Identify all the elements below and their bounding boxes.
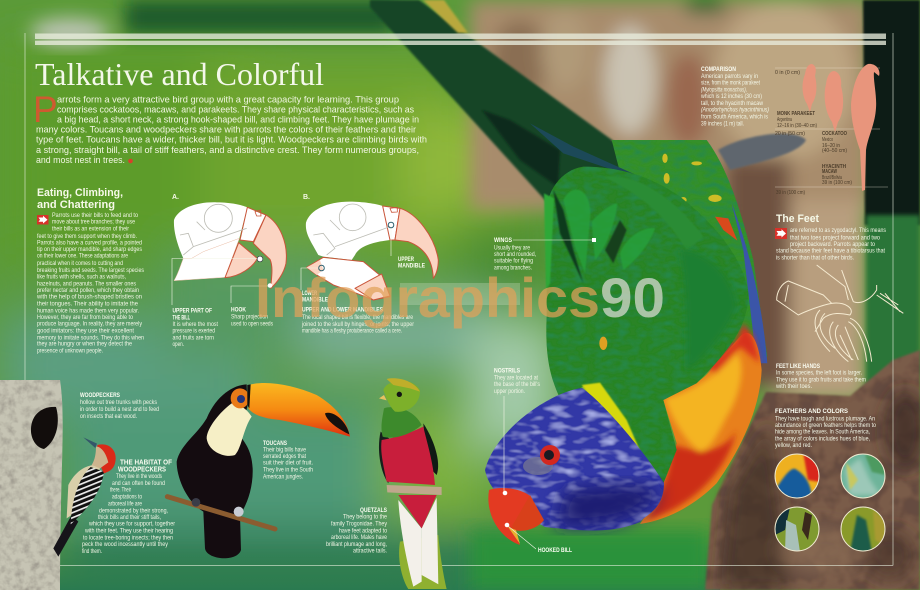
quetzals text: family Trogonidae. They bbox=[331, 522, 387, 528]
habitat of woodpeckers bbox=[82, 460, 175, 555]
intro text block: a strong, straight bill, a tail of stiff feathers, and a distinctive crest. They form numerous groups, bbox=[36, 145, 419, 155]
nostrils label: the base of the bill's bbox=[494, 382, 540, 388]
skull B bbox=[306, 202, 438, 300]
skull labels: THE BILL bbox=[172, 316, 190, 322]
quetzals text: have feet adapted to bbox=[339, 528, 388, 534]
feather sample: green and dark bbox=[775, 507, 819, 552]
woodpeckers text: in order to build a nest and to feed bbox=[80, 407, 159, 413]
watermark: 90 bbox=[600, 266, 665, 329]
comparison text: COMPARISON bbox=[701, 67, 736, 73]
feet like hands: with their toes. bbox=[775, 384, 812, 390]
icon: arrow bbox=[37, 215, 48, 224]
skull labels bbox=[172, 194, 425, 348]
chart: size silhouettes: 0 in (0 cm) bbox=[775, 70, 800, 76]
panel: eating, climbing and chattering: move about tree branches; they use bbox=[52, 220, 136, 226]
panel: eating, climbing and chattering: like fruits with shells, such as walnuts, bbox=[37, 274, 126, 280]
toucans text: Their big bills have bbox=[263, 447, 307, 453]
skull labels: pressure is exerted bbox=[172, 329, 215, 335]
skull labels: UPPER PART OF bbox=[172, 308, 212, 314]
wings label: short and rounded, bbox=[494, 252, 536, 258]
left wing sliver bbox=[544, 193, 554, 290]
feather sample rings bbox=[775, 454, 885, 551]
feet like hands bbox=[775, 364, 866, 390]
comparison text: tall, to the hyacinth macaw bbox=[701, 101, 764, 107]
icon: arrow bbox=[775, 228, 787, 239]
blue feather over back bbox=[530, 123, 640, 177]
feet like hands: They use it to grab fruits and take them bbox=[776, 378, 866, 384]
chart: size silhouettes: HYACINTH bbox=[822, 164, 846, 170]
comparison text: from South America, which is bbox=[701, 114, 768, 120]
skull labels: HOOK bbox=[231, 308, 247, 314]
nostrils label: NOSTRILS bbox=[494, 369, 520, 375]
title: Talkative and Colorful bbox=[35, 56, 324, 92]
chart: size silhouettes: 39 in (100 cm) bbox=[822, 180, 852, 186]
intro text block: a big head, a short neck, a strong hook-shaped bill, and climbing feet. They have plumage in bbox=[57, 115, 419, 125]
skull labels: Sharp projection bbox=[231, 314, 268, 320]
diagram: skulls bbox=[172, 194, 438, 348]
intro text block: type of feet. Toucans have a wider, thicker bill, but it is light. Woodpeckers are climbing birds with bbox=[36, 135, 427, 145]
panel: the feet: is shorter than that of other birds. bbox=[776, 255, 854, 261]
panel: eating, climbing and chattering: and Chattering bbox=[37, 199, 115, 211]
chart: size silhouettes: Brazil/Bolivia bbox=[822, 175, 843, 181]
skull labels: The local shaped bill is flexible; the mandibles are bbox=[302, 315, 414, 321]
silhouette: macaw bbox=[851, 64, 879, 191]
habitat of woodpeckers: adaptations to bbox=[112, 494, 143, 500]
panel: eating, climbing and chattering: presence of unknown people. bbox=[37, 348, 103, 354]
habitat of woodpeckers: THE HABITAT OF bbox=[120, 460, 173, 466]
habitat of woodpeckers: arboreal life are bbox=[108, 502, 143, 508]
toucans text: suit their diet of fruit. bbox=[263, 461, 313, 467]
intro text block: comprises cockatoos, macaws, and parakeets. They share physical characteristics, such as bbox=[57, 105, 414, 115]
panel: eating, climbing and chattering: memory to imitate sounds. They do this when bbox=[37, 335, 144, 341]
chart: size silhouettes: 20 in (50 cm) bbox=[775, 131, 805, 137]
silhouette: cockatoo bbox=[825, 71, 843, 132]
toucans text: serrated edges that bbox=[263, 454, 306, 460]
parrot body bbox=[530, 123, 767, 524]
chart: size silhouettes bbox=[775, 64, 888, 196]
skull labels: joined to the skull by hinges, or joints; the upper bbox=[301, 322, 414, 328]
panel: eating, climbing and chattering: human voice has made them very popular. bbox=[37, 308, 139, 314]
habitat of woodpeckers: there. Their bbox=[110, 488, 131, 494]
panel: eating, climbing and chattering: breaking fruits and seeds. The largest species bbox=[37, 268, 144, 274]
chart: size silhouettes: MONK PARAKEET bbox=[777, 111, 815, 117]
illustration: toucan bbox=[167, 383, 350, 558]
parrot bbox=[485, 123, 767, 545]
tail feathers bbox=[370, 0, 650, 215]
chart: size silhouettes: (40–50 cm) bbox=[822, 148, 847, 154]
tree trunk background bbox=[470, 0, 870, 400]
heading: The Feet bbox=[776, 213, 819, 225]
habitat of woodpeckers: demonstrated by their strong, bbox=[99, 508, 168, 514]
skull labels: A. bbox=[172, 194, 179, 201]
skull labels: UPPER bbox=[398, 257, 415, 263]
skull labels: open. bbox=[172, 342, 184, 348]
parrot bill bbox=[488, 488, 544, 545]
habitat of woodpeckers: thick bills and their stiff tails, bbox=[98, 515, 161, 521]
quetzals text: attractive tails. bbox=[353, 549, 387, 555]
intro text block bbox=[33, 89, 427, 165]
panel: feathers and colors: abundance of green feathers helps them to bbox=[775, 423, 877, 429]
illustration: quetzal bbox=[379, 378, 447, 589]
illustration: foot line drawing bbox=[777, 265, 903, 362]
panel: the feet: stand because their feet have a tibiotarsus that bbox=[776, 249, 885, 255]
panel: comparison bbox=[700, 64, 888, 196]
feather sample: yellow red blue bbox=[776, 454, 818, 498]
chart: size silhouettes: 16–20 in bbox=[822, 143, 840, 149]
illustration: woodpecker bbox=[53, 437, 116, 557]
yellow collar bbox=[582, 383, 643, 458]
end mark bbox=[128, 159, 133, 163]
woodpeckers text: hollow out tree trunks with pecks bbox=[80, 400, 157, 406]
woodpeckers text bbox=[80, 393, 159, 420]
toucans text: American jungles. bbox=[263, 474, 303, 480]
dark wing gap bbox=[553, 190, 583, 283]
habitat of woodpeckers: They live in the woods bbox=[116, 474, 162, 480]
panel: eating, climbing and chattering: with the help of brush-shaped bristles on bbox=[36, 295, 142, 301]
panel: eating, climbing and chattering: their bills as an extension of their bbox=[52, 227, 129, 233]
intro text block: and most nest in trees. bbox=[36, 155, 125, 165]
panel: eating, climbing and chattering: However, they are far from being able to bbox=[37, 315, 134, 321]
drop cap: P bbox=[33, 89, 58, 130]
habitat of woodpeckers: WOODPECKERS bbox=[118, 466, 166, 474]
wings label: WINGS bbox=[494, 238, 512, 244]
parrot eye bbox=[523, 445, 560, 475]
habitat of woodpeckers: peck the wood incessantly until they bbox=[82, 542, 168, 548]
skull labels: B. bbox=[303, 194, 310, 201]
panel: eating, climbing and chattering: Parrots also have a curved profile, a pointed bbox=[37, 240, 142, 246]
panel: eating, climbing and chattering: tip on their upper mandible, and sharp edges bbox=[37, 247, 142, 253]
comparison text bbox=[700, 67, 769, 128]
panel: eating, climbing and chattering: their tongues. Their ability to imitate the bbox=[37, 302, 139, 308]
panel: eating, climbing and chattering: produce language. In reality, they are merely bbox=[37, 322, 142, 328]
red accent bbox=[715, 217, 737, 241]
feet like hands: FEET LIKE HANDS bbox=[776, 364, 820, 370]
panel: eating, climbing and chattering: they are hungry or when they detect the bbox=[37, 342, 133, 348]
skull labels: MANDIBLE bbox=[302, 298, 328, 304]
panel: eating, climbing and chattering: hazelnuts, and peanuts. The smaller ones bbox=[37, 282, 136, 288]
small spot bbox=[599, 337, 607, 350]
panel: eating, climbing and chattering: prefer nectar and pollen, which they obtain bbox=[37, 288, 139, 294]
panel: feathers and colors: the array of colors includes hues of blue, bbox=[775, 436, 870, 442]
quetzals text: brilliant plumage and long, bbox=[326, 542, 387, 548]
hooked bill label: HOOKED BILL bbox=[538, 548, 572, 554]
toucans text: They live in the South bbox=[263, 467, 313, 473]
lower right bark bbox=[705, 350, 920, 590]
nostrils label: They are located at bbox=[494, 375, 538, 381]
feather sample: green blue bbox=[841, 507, 885, 552]
panel: eating, climbing and chattering: practical when it comes to cutting and bbox=[37, 261, 123, 267]
upper back bbox=[612, 140, 767, 357]
chart: size silhouettes: MACAW bbox=[822, 169, 837, 175]
habitat of woodpeckers: to locate tree-boring insects; they then bbox=[83, 535, 173, 541]
parrot head bbox=[485, 388, 664, 530]
quetzals text: arboreal life. Males have bbox=[331, 535, 388, 541]
skull labels: used to open seeds bbox=[231, 322, 273, 328]
panel: eating, climbing and chattering bbox=[36, 187, 144, 354]
tree trunk with nest hole bbox=[0, 380, 63, 590]
comparison text: which is 12 inches (30 cm) bbox=[700, 94, 762, 100]
panel: the feet: project backward. Parrots appear to bbox=[790, 242, 876, 248]
feet like hands: In some species, the left foot is larger. bbox=[776, 370, 862, 376]
panel: the feet bbox=[775, 213, 903, 390]
intro text block: arrots form a very attractive bird group with a great capacity for learning. This group bbox=[57, 94, 399, 104]
yellow spots bbox=[662, 154, 722, 203]
nostrils label bbox=[494, 369, 540, 495]
woodpeckers text: WOODPECKERS bbox=[80, 393, 120, 399]
panel: feathers and colors: hide among the leaves. In South America, bbox=[775, 430, 870, 436]
branch stub bbox=[718, 134, 806, 170]
panel: the feet: that two toes project forward and two bbox=[790, 235, 881, 241]
feather sample: teal bbox=[841, 454, 885, 498]
panel: eating, climbing and chattering: Parrots use their bills to feed and to bbox=[52, 213, 139, 219]
silhouette: parakeet bbox=[803, 64, 816, 112]
comparison text: size, from the monk parakeet bbox=[701, 80, 760, 86]
comparison text: 39 inches (1 m) tall. bbox=[701, 122, 744, 128]
comparison text: (Myiopsitta monachus), bbox=[701, 88, 747, 94]
callout lines and dots bbox=[172, 222, 394, 305]
watermark: Infographics bbox=[255, 266, 600, 329]
chest bbox=[640, 333, 762, 524]
dark background right bbox=[863, 0, 920, 225]
blue edge bbox=[732, 203, 767, 363]
panel: eating, climbing and chattering: feet to give them support when they climb. bbox=[37, 234, 137, 240]
main wing bbox=[546, 167, 748, 483]
skull labels: It is where the most bbox=[172, 322, 218, 328]
nostrils label: upper portion. bbox=[494, 389, 525, 395]
habitat of woodpeckers: and can often be found bbox=[112, 481, 165, 487]
panel: the feet: are referred to as zygodactyl. This means bbox=[790, 228, 886, 234]
skull labels: mandible has a fleshy protuberance called a cere. bbox=[302, 328, 402, 334]
habitat of woodpeckers: with their feet. They use their hearing bbox=[84, 529, 173, 535]
heading: FEATHERS AND COLORS bbox=[775, 409, 848, 415]
bark shading bbox=[720, 390, 920, 590]
quetzals text: They belong to the bbox=[343, 515, 388, 521]
intro text block: many colors. Toucans and woodpeckers share with parrots the colors of their feathers and their bbox=[36, 125, 416, 135]
chart: size silhouettes: 12–16 in (30–40 cm) bbox=[777, 123, 817, 129]
skull labels: MANDIBLE bbox=[398, 264, 425, 270]
wings label bbox=[494, 238, 596, 272]
chart: size silhouettes: Mexico bbox=[822, 137, 833, 143]
chart: size silhouettes: COCKATOO bbox=[822, 131, 847, 137]
toucans text bbox=[263, 441, 313, 480]
habitat of woodpeckers: find them. bbox=[82, 549, 102, 555]
skull A bbox=[174, 202, 286, 288]
woodpeckers text: on insects that eat wood. bbox=[80, 414, 137, 420]
skull labels: LOWER bbox=[302, 291, 317, 297]
chart: size silhouettes: Argentina bbox=[777, 117, 793, 123]
comparison text: (Anodorhynchus hyacinthinus) bbox=[701, 108, 769, 114]
wings label: suitable for flying bbox=[494, 259, 533, 265]
wings label: Usually they are bbox=[494, 245, 531, 251]
heading: Eating, Climbing, bbox=[37, 187, 123, 199]
quetzals text bbox=[326, 508, 388, 555]
nest hole bbox=[31, 407, 58, 449]
habitat of woodpeckers: which they use for support, together bbox=[88, 522, 175, 528]
parrot callouts bbox=[494, 238, 596, 554]
panel: feathers and colors: They have tough and lustrous plumage. An bbox=[775, 416, 875, 422]
panel: feathers and colors bbox=[775, 409, 885, 552]
panel: eating, climbing and chattering: on their lower one. These adaptations are bbox=[37, 254, 129, 260]
comparison text: American parrots vary in bbox=[701, 74, 758, 80]
panel: eating, climbing and chattering: good imitators: they use their excellent bbox=[37, 328, 134, 334]
wing feather highlights bbox=[563, 190, 655, 273]
hooked bill label bbox=[505, 523, 572, 554]
wings label: among branches. bbox=[494, 266, 532, 272]
quetzals text: QUETZALS bbox=[360, 508, 387, 514]
chart: size silhouettes: 39 in (100 cm) bbox=[776, 190, 805, 196]
panel: feathers and colors: yellow, and red. bbox=[775, 443, 812, 449]
toucans text: TOUCANS bbox=[263, 441, 287, 447]
skull labels: and fruits are torn bbox=[172, 335, 214, 341]
skull labels: UPPER AND LOWER MANDIBLES bbox=[302, 308, 383, 314]
